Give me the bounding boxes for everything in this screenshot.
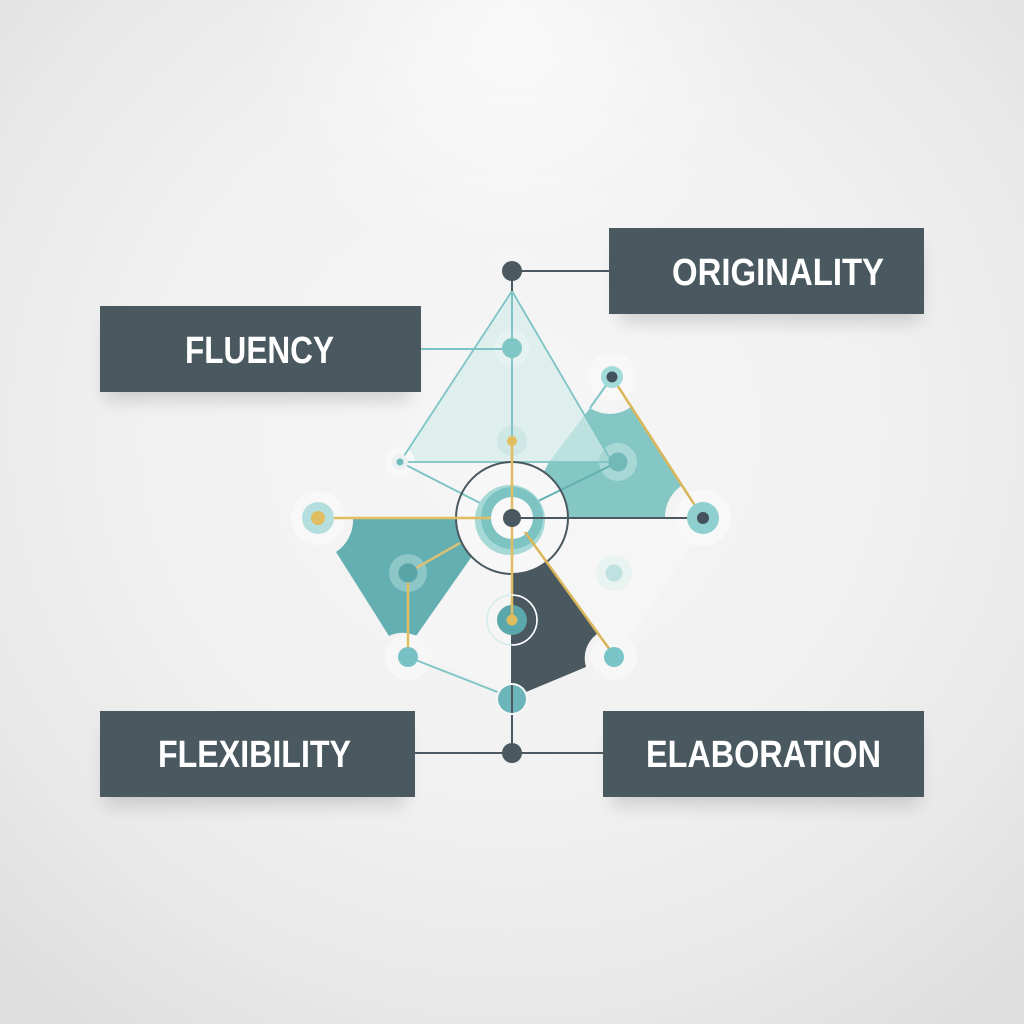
hub core <box>503 509 521 527</box>
connector: gold upper right edge <box>612 377 703 518</box>
connector: gold left drop <box>407 573 409 657</box>
label: fluency: FLUENCY <box>185 330 334 372</box>
node halo: left segment centre <box>389 554 427 592</box>
connector: hub to right node <box>512 517 703 519</box>
connector: gold left diagonal <box>416 543 460 568</box>
connector: top right node stub <box>590 377 612 408</box>
connector: right node to hub <box>528 462 618 506</box>
node halo: top right <box>588 353 636 401</box>
connector: gold horizontal <box>318 517 491 519</box>
node: far left <box>302 502 334 534</box>
connector: left node to hub <box>400 462 482 504</box>
panel: pale triangle <box>400 291 612 462</box>
connector: gold vertical <box>511 441 513 620</box>
node: faint right <box>596 555 632 591</box>
connector: triangle spine <box>511 291 513 441</box>
node: teal segment centre <box>608 452 628 472</box>
connector: lower left to bottom node <box>408 657 500 693</box>
node: right <box>687 502 719 534</box>
node halo: upper gold <box>497 426 527 456</box>
panel: lower left pale segment <box>416 552 512 692</box>
node: bottom <box>496 683 528 715</box>
node: lower left <box>398 647 418 667</box>
node halo: fluency <box>494 330 530 366</box>
panel: left teal segment <box>336 518 476 636</box>
node halo: right <box>675 490 731 546</box>
node halo: lower left <box>385 634 431 680</box>
label: elaboration <box>603 711 924 805</box>
label: flexibility: FLEXIBILITY <box>158 734 351 776</box>
node: centre lower <box>487 595 537 645</box>
connector: originality line <box>512 271 609 291</box>
connector: bottom lines <box>415 620 603 753</box>
node: triangle left <box>392 454 408 470</box>
diagram: central network <box>291 261 731 763</box>
node halo: lower right <box>591 634 637 680</box>
label: elaboration: ELABORATION <box>646 734 881 776</box>
connector: gold diagonal lower right <box>525 532 610 650</box>
hub rings <box>456 462 568 574</box>
node: bottom dark <box>502 743 522 763</box>
node: fluency <box>502 338 522 358</box>
panel: dark segment <box>511 562 597 692</box>
node: left segment centre <box>398 564 418 582</box>
label: flexibility <box>100 711 415 805</box>
triangle outline <box>400 291 618 462</box>
central white disc <box>456 462 568 574</box>
node halo: triangle left <box>385 447 415 477</box>
panel: upper right teal segment <box>520 407 681 518</box>
label: originality: ORIGINALITY <box>672 252 884 294</box>
label: fluency <box>100 306 421 400</box>
node: top dark <box>502 261 522 281</box>
node halo: far left <box>291 491 345 545</box>
node: top right <box>601 366 623 388</box>
node halo: teal segment centre <box>599 443 637 481</box>
connector: fluency line <box>421 348 512 350</box>
label: originality <box>609 228 924 322</box>
node: lower right <box>604 647 624 667</box>
node: upper gold <box>507 436 517 446</box>
panel: right pale segment <box>530 518 720 657</box>
